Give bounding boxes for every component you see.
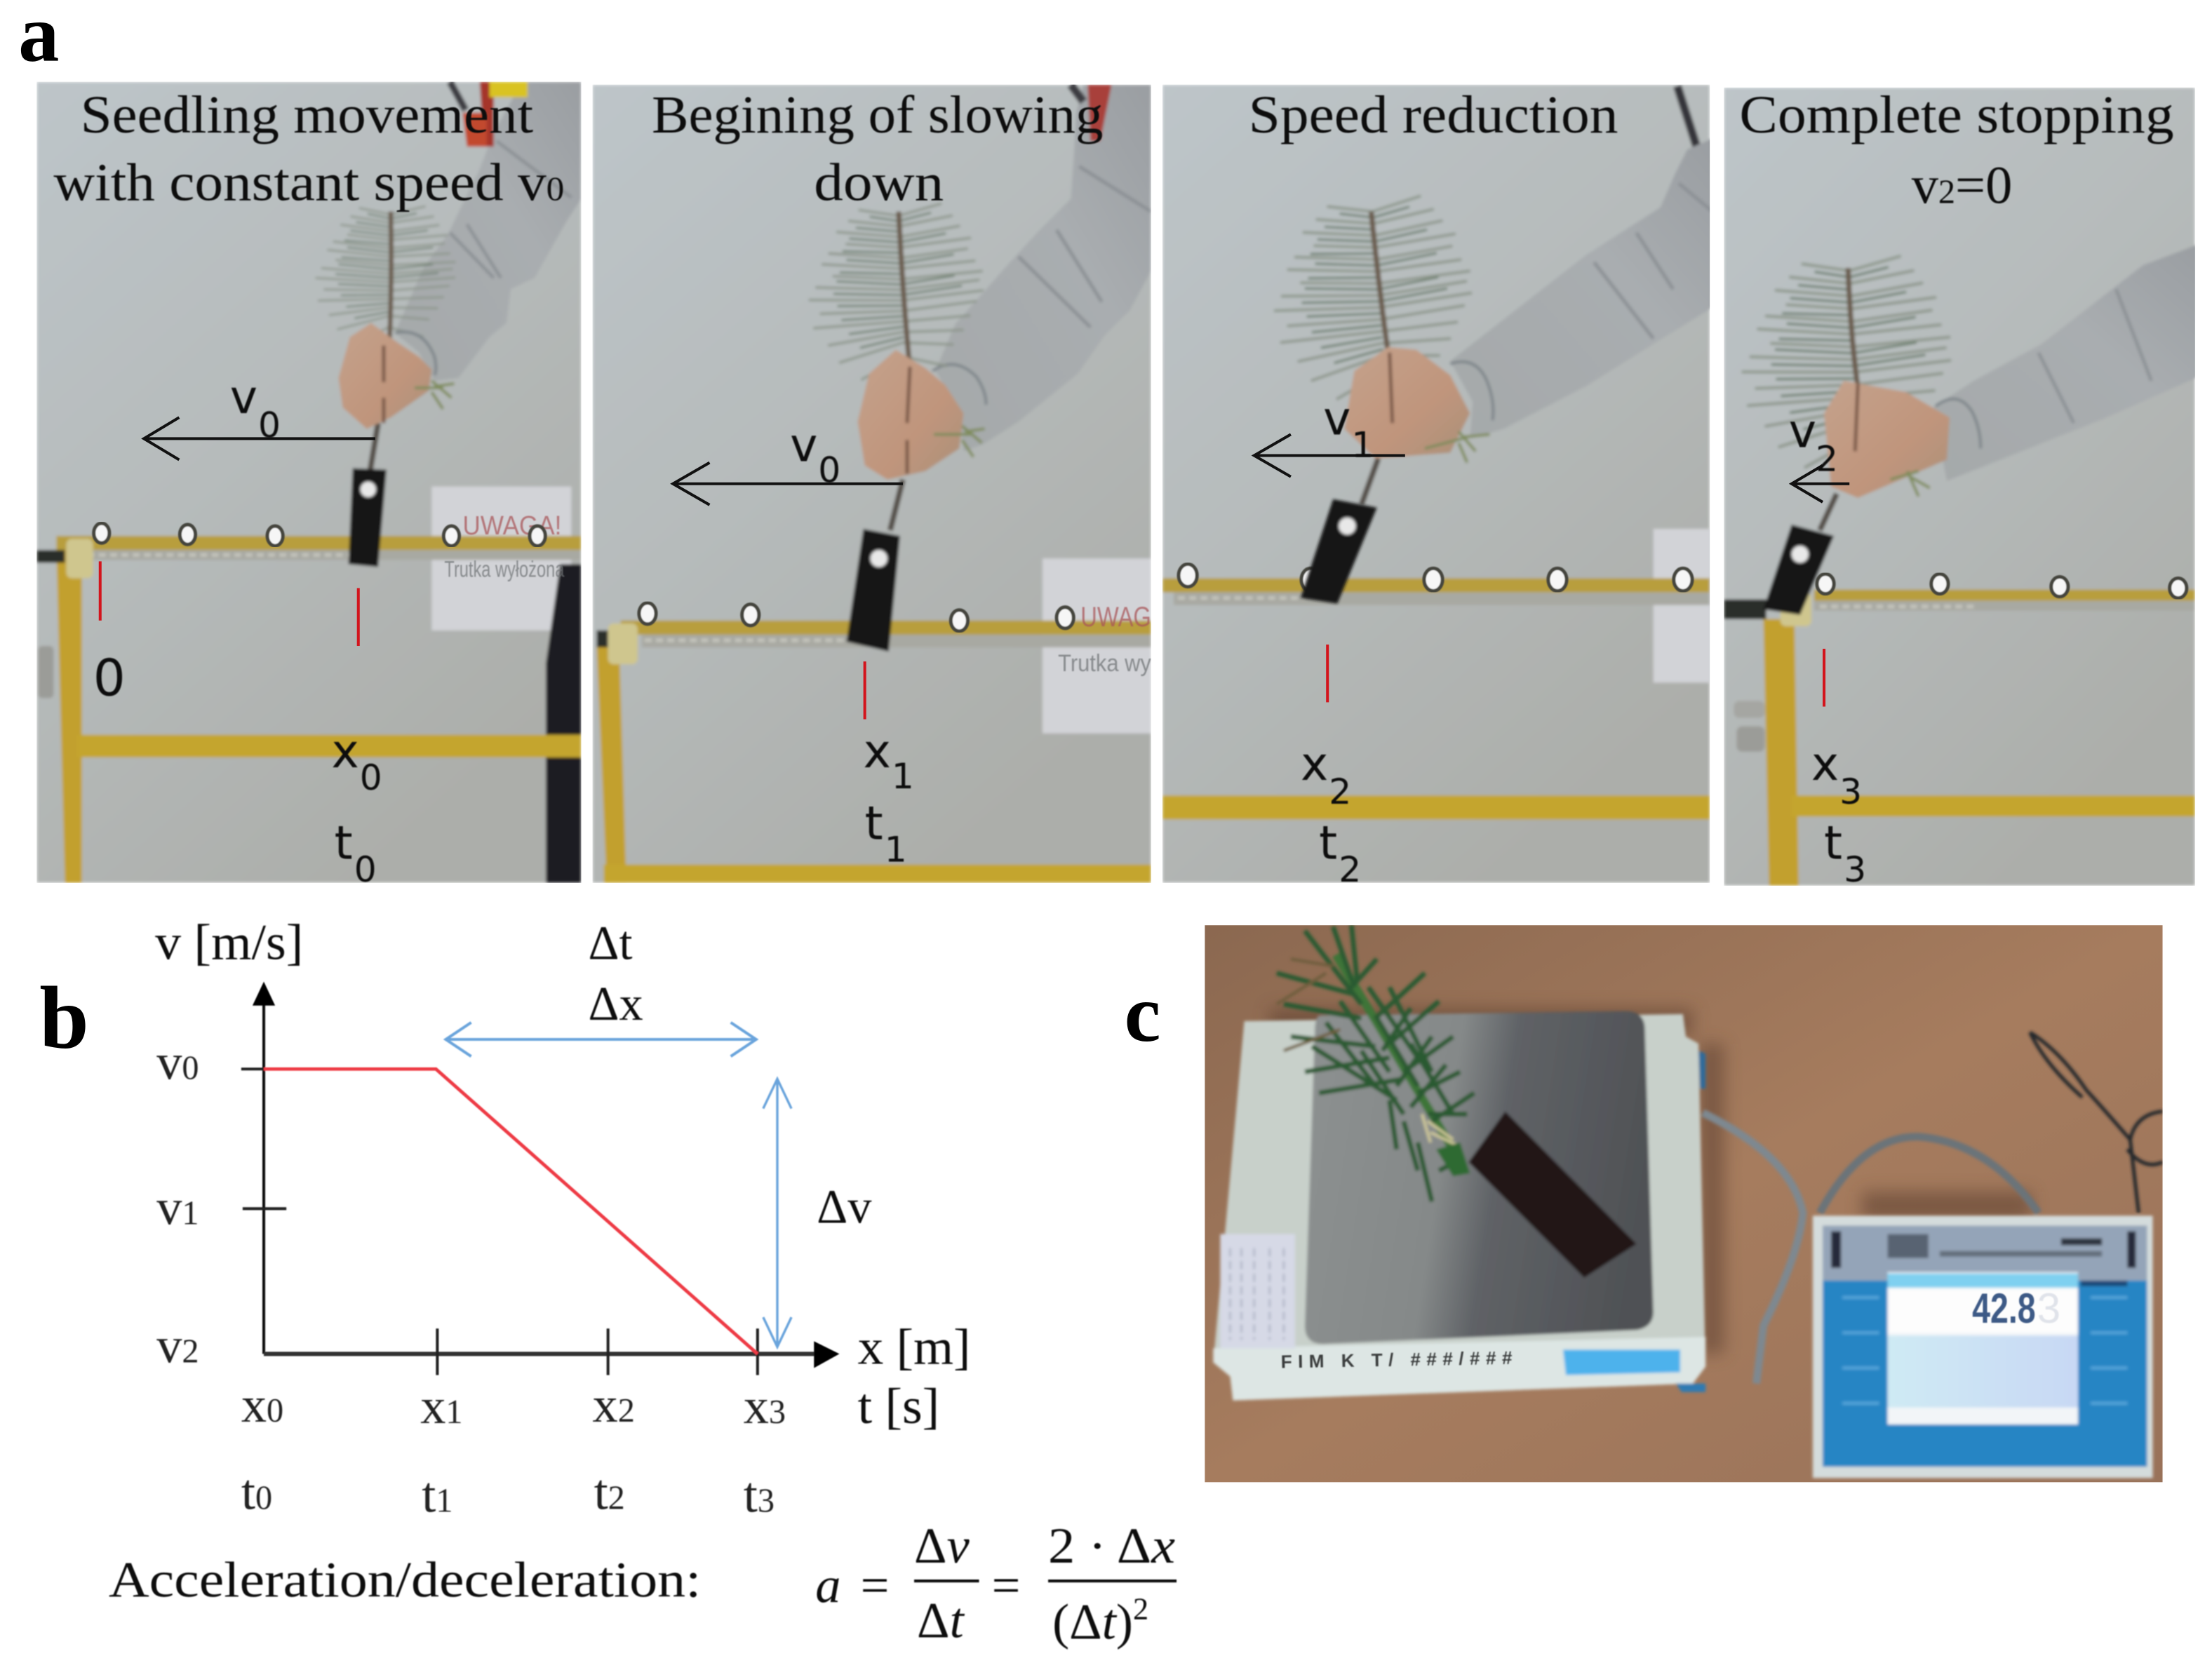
label t3: t — [1824, 816, 1842, 870]
label x2: 2 — [1329, 771, 1351, 812]
x axis titles — [858, 1319, 970, 1434]
time tick labels: t2 — [594, 1464, 625, 1521]
heading: begining of slowing down: down — [814, 153, 944, 213]
formula — [815, 1517, 1177, 1650]
label v0: v — [230, 370, 257, 424]
panel label c: c — [1125, 969, 1160, 1059]
label x2: x — [1301, 736, 1328, 791]
label v0: 0 — [818, 450, 840, 491]
label v1: 1 — [1351, 424, 1374, 466]
panel: speed reduction — [1162, 85, 1712, 890]
heading: seedling movement: Seedling movement — [81, 85, 533, 144]
formula: Δv — [914, 1517, 970, 1574]
y tick labels: v2 — [156, 1317, 199, 1374]
marker dots on rail — [1179, 564, 1692, 591]
velocity arrow v0 — [673, 463, 903, 505]
photo detail: warning poster text — [1058, 601, 1152, 677]
x tick labels: x2 — [593, 1376, 635, 1433]
marker dots on rail — [639, 603, 1073, 631]
photo detail: warning poster text: UWAG — [1080, 601, 1151, 633]
red position marks — [100, 561, 358, 646]
blue double arrow: delta x — [445, 1023, 756, 1056]
label x3: x — [1811, 736, 1839, 791]
marker dots on rail — [1817, 574, 2187, 598]
axis ticks — [241, 1069, 758, 1375]
y tick labels — [156, 1033, 199, 1374]
velocity arrow v0 — [144, 417, 375, 460]
panel: beginning of slowing down — [593, 85, 1152, 883]
formula: a — [815, 1556, 840, 1613]
balance display reading: 42.8 — [1972, 1284, 2036, 1332]
label t1: 1 — [885, 829, 907, 870]
velocity profile line — [264, 1069, 758, 1354]
formula: (Δt) — [1052, 1593, 1133, 1650]
balance handwritten label: FIM K T/ ###/### — [1280, 1347, 1513, 1373]
y tick labels: v1 — [156, 1178, 199, 1235]
panel: complete stopping — [1724, 85, 2199, 890]
panel label b: b — [39, 969, 89, 1067]
x tick labels — [241, 1376, 786, 1434]
heading: seedling movement: with constant speed v 0 — [53, 153, 563, 213]
photo: balance, seedling and cables — [1213, 925, 2163, 1478]
heading: complete stopping: Complete stopping — [1739, 85, 2174, 144]
red position mark — [864, 661, 866, 720]
panel: seedling movement with constant speed — [36, 82, 581, 890]
photo: complete stop scene — [1724, 88, 2199, 886]
photo detail: warning poster text: UWAGA! — [463, 511, 561, 541]
formula: = — [861, 1556, 889, 1613]
y axis title: v [m/s] — [155, 913, 303, 970]
label t0: t — [335, 816, 353, 870]
motion sensor — [1301, 499, 1377, 604]
x axis titles: t [s] — [858, 1377, 939, 1434]
faded last digit: 3 — [2037, 1284, 2060, 1332]
blue double arrow: delta v — [763, 1079, 791, 1347]
delta t label: Δt — [589, 916, 632, 969]
photo: slowing scene — [593, 85, 1151, 883]
label v0: v — [790, 418, 817, 473]
label x1: 1 — [892, 755, 914, 797]
label t0: 0 — [354, 849, 377, 890]
photo: constant speed scene — [36, 82, 581, 883]
table surface — [1205, 925, 2163, 1482]
label x3: 3 — [1839, 771, 1862, 812]
label t2: 2 — [1339, 849, 1361, 890]
label v1: v — [1323, 391, 1350, 445]
y tick labels: v0 — [156, 1033, 199, 1090]
heading: complete stopping: v2=0 — [1912, 156, 2012, 215]
x tick labels: x0 — [241, 1376, 283, 1433]
origin label: 0 — [93, 649, 126, 708]
label x0: 0 — [360, 757, 382, 798]
delta v label: Δv — [817, 1180, 872, 1233]
formula caption: Acceleration/deceleration: — [109, 1551, 701, 1608]
photo detail: warning poster text: Trutka wyłożona — [444, 556, 564, 581]
x tick labels: x3 — [744, 1377, 786, 1434]
label x1: x — [864, 724, 891, 779]
photo: speed reduction scene — [1162, 85, 1712, 883]
label t1: t — [865, 795, 883, 850]
marker dots on rail — [94, 523, 545, 546]
time tick labels: t3 — [744, 1467, 775, 1523]
formula: 2 · Δx — [1048, 1517, 1175, 1574]
time tick labels: t1 — [422, 1467, 453, 1523]
time tick labels: t0 — [241, 1464, 272, 1521]
formula: Δt — [917, 1592, 965, 1649]
red position mark — [1327, 645, 1328, 702]
delta x label: Δx — [589, 977, 643, 1030]
chart axes — [253, 982, 839, 1368]
formula: = — [992, 1556, 1020, 1613]
label t3: 3 — [1844, 849, 1866, 890]
label t2: t — [1319, 816, 1337, 870]
velocity arrow v1 — [1254, 434, 1405, 477]
label x0: x — [332, 724, 359, 779]
panel: velocity chart — [155, 913, 970, 1523]
x axis titles: x [m] — [858, 1319, 970, 1375]
x tick labels: x1 — [420, 1377, 463, 1434]
velocity arrow v2 — [1792, 466, 1849, 502]
time tick labels — [241, 1464, 775, 1523]
red position mark — [1823, 649, 1825, 706]
table shadows — [1270, 1009, 2032, 1354]
photo detail: warning poster text: Trutka wy — [1058, 650, 1152, 677]
panel: weighing photo — [1205, 925, 2163, 1482]
label v0: 0 — [258, 404, 281, 445]
formula: 2 — [1133, 1591, 1148, 1626]
heading: begining of slowing down: Begining of slowing — [652, 85, 1103, 144]
photo detail: warning poster text — [444, 511, 564, 581]
label v2: 2 — [1816, 438, 1838, 480]
heading: speed reduction: Speed reduction — [1249, 85, 1618, 144]
label v2: v — [1789, 403, 1816, 458]
